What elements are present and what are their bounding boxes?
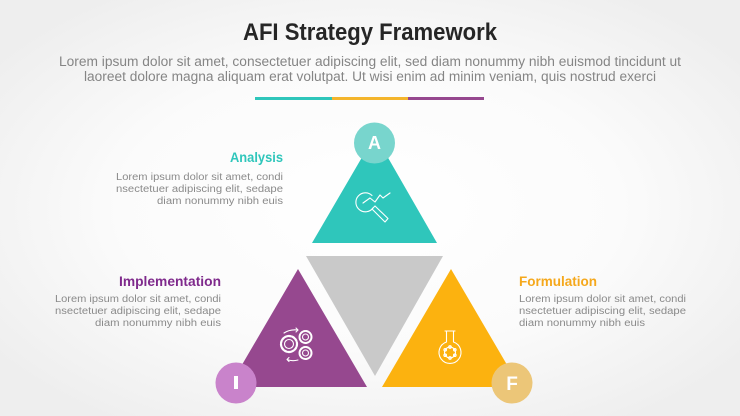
text block: analysis: Lorem ipsum dolor sit amet, condi xyxy=(116,172,283,183)
text block: formulation: nsectetuer adipiscing elit, sedape xyxy=(519,306,686,317)
subtitle text: Lorem ipsum dolor sit amet, consectetuer adipiscing elit, sed diam nonummy nibh euismod tincidunt ut xyxy=(59,54,681,69)
panel: analysis triangle xyxy=(312,135,437,243)
text block: analysis: Analysis xyxy=(230,150,283,165)
badge: A xyxy=(354,122,395,164)
icon: flask xyxy=(439,331,461,363)
text block: implementation: nsectetuer adipiscing elit, sedape xyxy=(55,306,221,317)
subtitle text: laoreet dolore magna aliquam erat volutpat. Ut wisi enim ad minim veniam, quis nostrud exerci xyxy=(84,69,656,84)
badge: F xyxy=(492,362,532,404)
panel: implementation triangle xyxy=(229,269,367,387)
text block: analysis: nsectetuer adipiscing elit, sedape xyxy=(116,184,283,195)
badge: F: F xyxy=(506,374,518,395)
text block: implementation: Lorem ipsum dolor sit amet, condi xyxy=(55,294,221,305)
badge: A: A xyxy=(368,133,381,153)
text block: formulation: Formulation xyxy=(519,274,597,289)
text block: formulation xyxy=(519,274,686,329)
tricolor divider xyxy=(255,97,484,100)
text block: implementation: diam nonummy nibh euis xyxy=(95,318,221,329)
center grey inverted triangle xyxy=(306,256,443,376)
text block: implementation xyxy=(55,274,221,329)
icon: gears with arrows xyxy=(281,328,312,362)
text block: formulation: Lorem ipsum dolor sit amet, condi xyxy=(519,294,686,305)
subtitle text xyxy=(59,54,681,84)
text block: analysis xyxy=(116,150,283,207)
panel: formulation triangle xyxy=(382,269,520,387)
icon: magnifier with chart xyxy=(356,193,390,222)
title: AFI Strategy Framework xyxy=(243,19,498,46)
text block: formulation: diam nonummy nibh euis xyxy=(519,318,645,329)
text block: analysis: diam nonummy nibh euis xyxy=(157,196,283,207)
badge: I xyxy=(216,362,256,404)
text block: implementation: Implementation xyxy=(119,274,221,289)
